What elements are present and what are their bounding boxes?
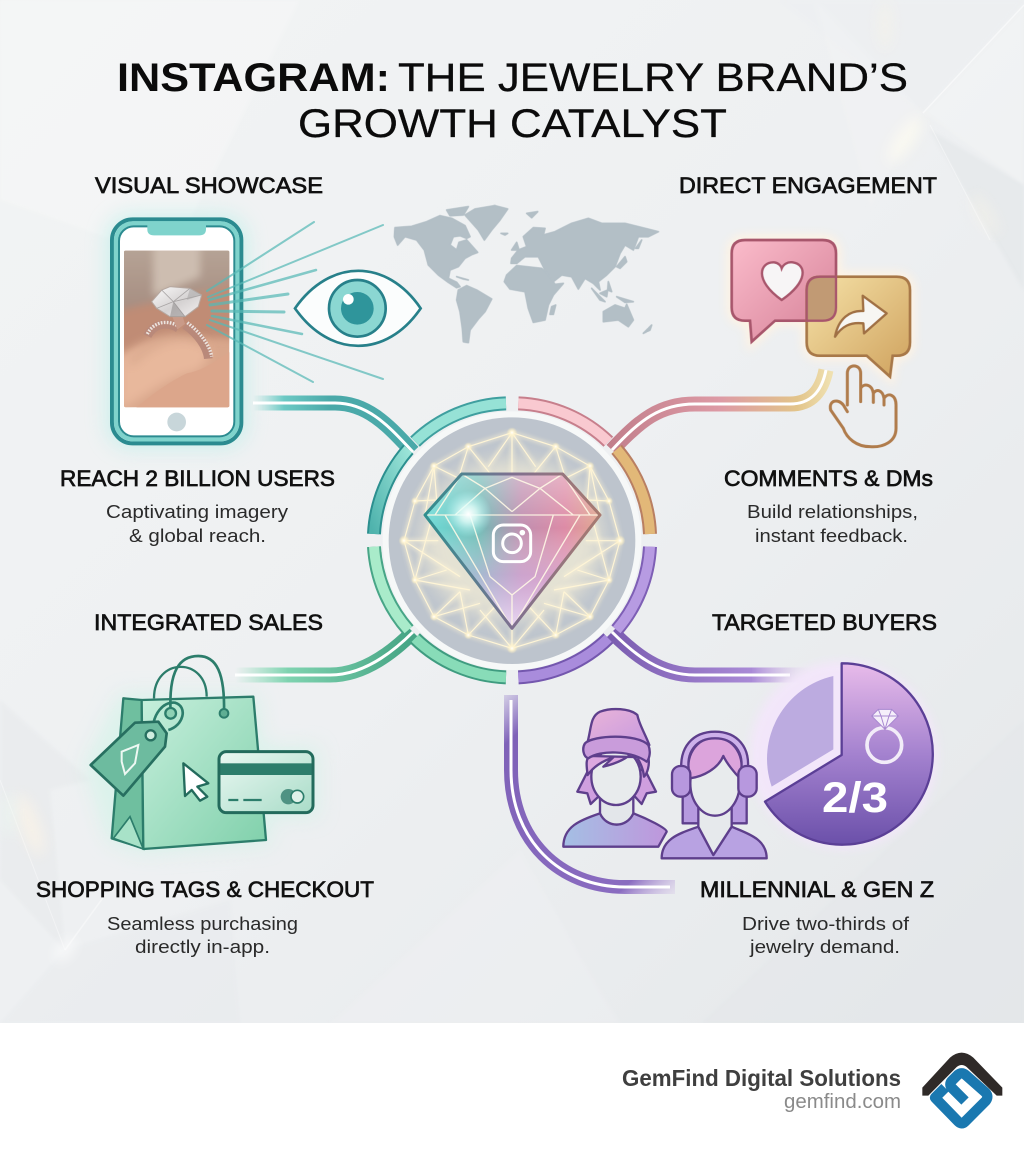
text block: reach 2 billion users: & global reach. <box>129 526 266 546</box>
footer brand text <box>622 1065 901 1113</box>
icon: two-thirds pie chart <box>749 661 937 849</box>
glowing nodes <box>399 427 625 654</box>
text block: comments and DMs <box>724 466 933 546</box>
pointing hand <box>830 366 896 447</box>
text block: shopping tags and checkout <box>36 877 374 957</box>
photo: diamond ring on finger <box>124 250 230 408</box>
heading: integrated sales: INTEGRATED SALES <box>94 610 323 635</box>
icon: shopping bag with tag and card <box>90 656 313 849</box>
heading: targeted buyers: TARGETED BUYERS <box>712 610 937 635</box>
icon: instagram logo <box>493 525 531 562</box>
text block: comments and DMs: instant feedback. <box>755 526 908 546</box>
credit card <box>219 752 313 813</box>
text block: millennial and gen z: MILLENNIAL & GEN Z <box>700 877 934 902</box>
text block: comments and DMs: COMMENTS & DMs <box>724 466 933 491</box>
text block: millennial and gen z: Drive two-thirds of <box>742 914 910 934</box>
title: GROWTH CATALYST <box>298 102 727 146</box>
connector: purple to millennials <box>511 695 675 887</box>
text block: shopping tags and checkout: SHOPPING TAGS & CHECKOUT <box>36 877 374 902</box>
footer brand text: GemFind Digital Solutions <box>622 1065 901 1091</box>
title <box>117 56 908 146</box>
price tag <box>91 722 167 796</box>
gold share bubble <box>807 277 910 377</box>
heading: visual showcase: VISUAL SHOWCASE <box>95 173 323 198</box>
pink heart bubble <box>732 240 836 342</box>
text block: millennial and gen z: jewelry demand. <box>749 937 900 957</box>
icon: eye <box>295 271 421 346</box>
cursor arrow <box>183 763 208 801</box>
text block: comments and DMs: Build relationships, <box>747 502 918 522</box>
icon: two young people <box>563 709 767 858</box>
text block: millennial and gen z <box>700 877 934 957</box>
connector: green <box>235 632 413 675</box>
logo: GemFind <box>922 1053 1002 1123</box>
text block: shopping tags and checkout: Seamless purchasing <box>107 914 298 934</box>
title: INSTAGRAM: <box>117 56 390 100</box>
ring arcs <box>374 403 650 677</box>
icon: chat bubbles and pointing hand <box>732 240 910 447</box>
connector: pink to gold <box>612 370 826 450</box>
icon: phone showing ring <box>107 215 247 448</box>
text block: reach 2 billion users <box>60 466 335 546</box>
facet diamond <box>425 474 600 628</box>
world map <box>394 206 658 343</box>
text block: shopping tags and checkout: directly in-app. <box>135 937 270 957</box>
heading: direct engagement: DIRECT ENGAGEMENT <box>679 173 937 198</box>
person with beanie <box>563 709 667 847</box>
pie label 2/3: 2/3 <box>822 774 888 822</box>
connector: purple to pie <box>612 632 812 675</box>
person with headphones <box>662 732 767 858</box>
central hub: diamond with instagram logo <box>374 403 650 677</box>
connector: teal <box>253 403 413 452</box>
geometric web <box>404 433 620 648</box>
light rays from phone to eye <box>207 222 383 382</box>
footer brand text: gemfind.com <box>784 1091 901 1113</box>
text block: reach 2 billion users: REACH 2 BILLION USERS <box>60 466 335 491</box>
title: THE JEWELRY BRAND’S <box>398 56 908 100</box>
text block: reach 2 billion users: Captivating imagery <box>106 502 288 522</box>
footer band <box>0 1023 1024 1154</box>
ring icon <box>867 709 902 762</box>
